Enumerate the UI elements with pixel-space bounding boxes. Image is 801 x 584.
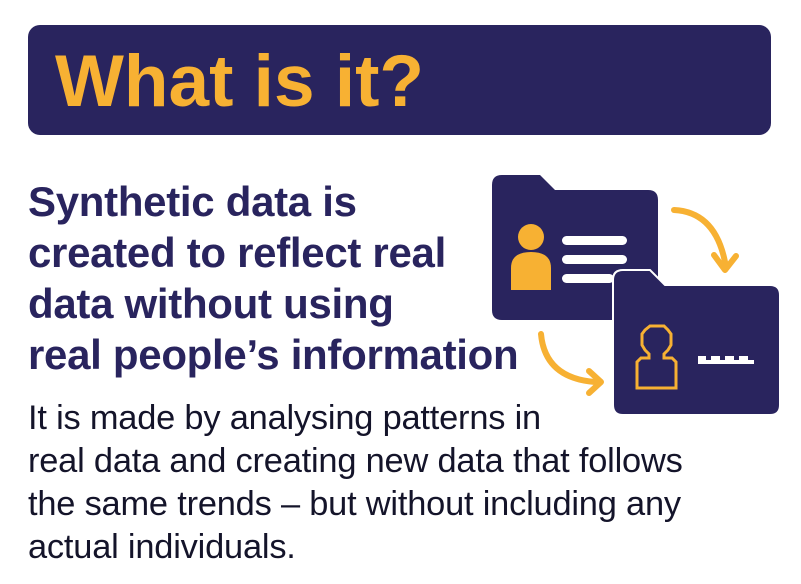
body text: actual individuals. (28, 528, 296, 566)
heading: Synthetic data is (28, 178, 357, 225)
body text (28, 399, 683, 566)
heading: real people’s information (28, 331, 518, 378)
heading: created to reflect real (28, 229, 446, 276)
arrow: bottom left (541, 334, 601, 393)
title: What is it? (55, 41, 424, 122)
icon: synthetic data folder (613, 270, 780, 415)
body text: the same trends – but without including any (28, 485, 681, 523)
icon: real data folder (492, 175, 658, 320)
heading: data without using (28, 280, 394, 327)
heading (28, 178, 518, 378)
arrow: top right (674, 210, 736, 270)
title bar (28, 25, 771, 135)
body text: It is made by analysing patterns in (28, 399, 541, 437)
body text: real data and creating new data that follows (28, 442, 683, 480)
